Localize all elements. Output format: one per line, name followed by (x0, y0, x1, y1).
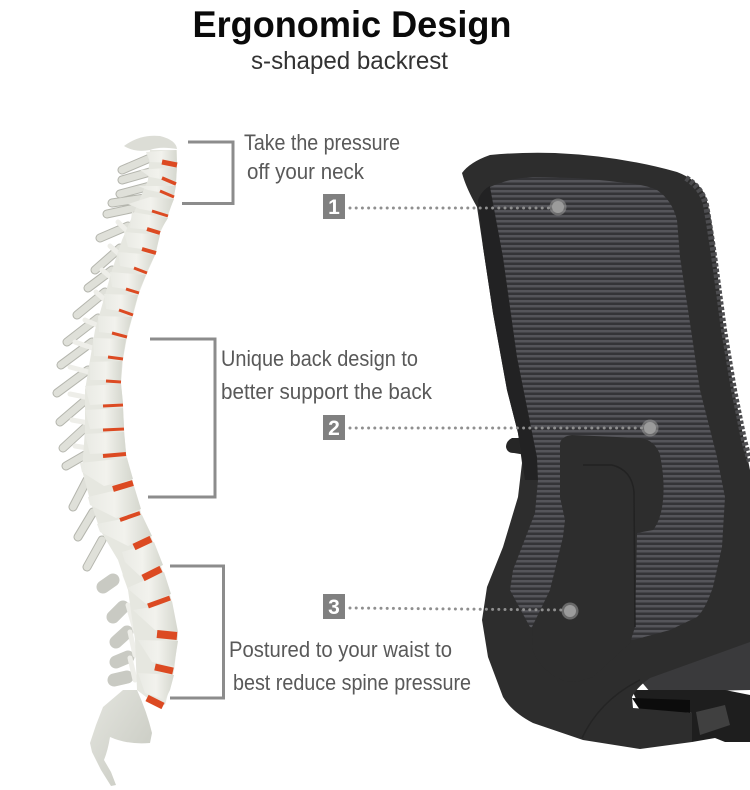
intervertebral discs (103, 162, 177, 706)
marker 2: 2 (328, 417, 340, 440)
marker 3 (323, 594, 578, 620)
bracket 1 (182, 142, 233, 204)
callout text: back (221, 346, 433, 404)
frame crease (582, 680, 640, 738)
sacrum (90, 690, 152, 786)
frame inner shadow (478, 186, 538, 480)
atlas vertebra (124, 136, 177, 151)
lumbar support pad (532, 435, 664, 682)
edge mesh strip (686, 178, 750, 462)
callout text: waist (229, 637, 471, 695)
marker 1: 1 (328, 196, 340, 219)
mechanism (632, 690, 750, 742)
arm stub (506, 438, 526, 455)
mesh panel (485, 170, 730, 645)
marker 3: 3 (328, 596, 340, 619)
bracket 2 (148, 339, 215, 497)
callout text: back: Unique back design to (221, 346, 418, 371)
callout text: back: better support the back (221, 379, 433, 404)
lumbar pad inner panel (583, 465, 635, 627)
vertebral processes (57, 158, 150, 680)
callout text: neck (244, 130, 400, 184)
callout text: waist: best reduce spine pressure (233, 670, 471, 695)
marker 1 (323, 194, 566, 219)
callout text: waist: Postured to your waist to (229, 637, 452, 662)
subtitle: s-shaped backrest (251, 47, 448, 75)
title: Ergonomic Design (192, 4, 512, 45)
marker 2 (323, 415, 658, 440)
seat cushion (640, 640, 750, 692)
callout text: neck: Take the pressure (244, 130, 400, 155)
bracket 3 (170, 566, 224, 698)
back frame (462, 153, 750, 749)
callout text: neck: off your neck (247, 159, 365, 184)
vertebral bodies (80, 150, 178, 700)
spinal column backing (82, 150, 178, 705)
spine illustration (57, 136, 178, 786)
office chair backrest (462, 153, 750, 749)
